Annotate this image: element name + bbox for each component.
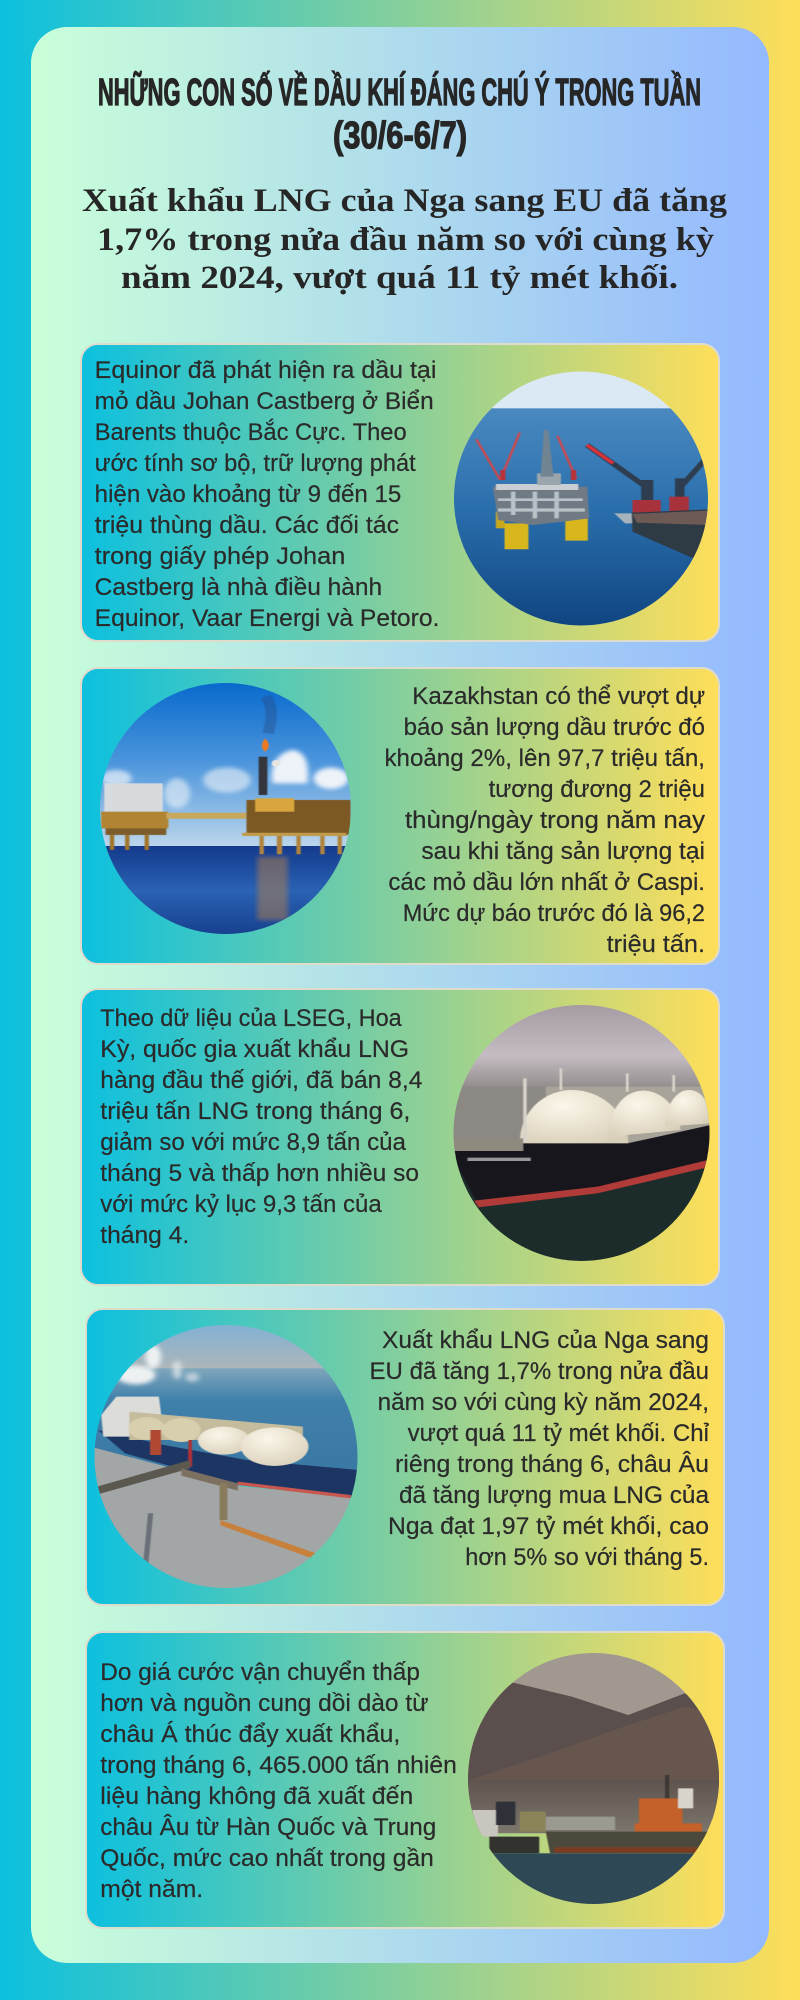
text block: Kazakhstan [384, 683, 705, 958]
text block: Russia LNG: riêng trong tháng 6, châu Âu [395, 1451, 709, 1478]
text block: jet fuel: hơn và nguồn cung dồi dào từ [100, 1690, 429, 1717]
title [98, 69, 701, 157]
text block: LSEG [100, 1005, 423, 1249]
reflection on water [257, 857, 288, 920]
text block: jet fuel: liệu hàng không đã xuất đến [100, 1783, 413, 1810]
panel: LSEG US LNG [81, 989, 719, 1285]
text block: Equinor: triệu thùng dầu. Các đối tác [95, 512, 399, 539]
title: (30/6-6/7) [333, 115, 467, 157]
text block: Equinor: hiện vào khoảng từ 9 đến 15 [95, 481, 401, 508]
photo: LNG tanker at terminal [90, 1322, 364, 1590]
text block: Equinor: mỏ dầu Johan Castberg ở Biển [95, 388, 434, 415]
subtitle: năm 2024, vượt quá 11 tỷ mét khối. [121, 260, 678, 296]
text block: Kazakhstan: sau khi tăng sản lượng tại [421, 838, 705, 865]
panel: Equinor Johan Castberg [81, 344, 719, 641]
text block: Kazakhstan: khoảng 2%, lên 97,7 triệu tấn, [384, 745, 705, 772]
text block: jet fuel: một năm. [100, 1876, 203, 1903]
text block: Kazakhstan: các mỏ dầu lớn nhất ở Caspi. [388, 869, 705, 896]
text block: Kazakhstan: thùng/ngày trong năm nay [405, 807, 705, 834]
text block: LSEG: Theo dữ liệu của LSEG, Hoa [100, 1005, 402, 1032]
photo: offshore platform and crane vessel [450, 367, 715, 628]
subtitle [82, 183, 728, 296]
text block: jet fuel: trong tháng 6, 465.000 tấn nhiên [100, 1752, 457, 1779]
panel: Russia LNG export to EU [86, 1309, 724, 1605]
text block: Kazakhstan: Mức dự báo trước đó là 96,2 [403, 900, 705, 927]
text block: jet fuel: Do giá cước vận chuyển thấp [100, 1659, 420, 1686]
text block: Russia LNG: Xuất khẩu LNG của Nga sang [382, 1327, 709, 1354]
text block: Equinor: Equinor đã phát hiện ra dầu tại [95, 357, 436, 384]
text block: LSEG: Kỳ, quốc gia xuất khẩu LNG [100, 1036, 409, 1063]
subtitle: 1,7% trong nửa đầu năm so với cùng kỳ [97, 222, 715, 258]
text block: jet fuel: Quốc, mức cao nhất trong gần [100, 1845, 434, 1872]
text block: Russia LNG: vượt quá 11 tỷ mét khối. Chỉ [408, 1420, 710, 1447]
text block: Kazakhstan: Kazakhstan có thể vượt dự [412, 683, 705, 710]
photo: LNG carrier Energy Progress [450, 1003, 715, 1263]
text block: Russia LNG: EU đã tăng 1,7% trong nửa đầu [370, 1358, 709, 1385]
text block: Kazakhstan: tương đương 2 triệu [489, 776, 705, 803]
text block: LSEG: triệu tấn LNG trong tháng 6, [100, 1098, 410, 1125]
text block: Russia LNG: đã tăng lượng mua LNG của [399, 1482, 710, 1509]
text block: Russia LNG [370, 1327, 710, 1571]
text block: LSEG: tháng 5 và thấp hơn nhiều so [100, 1160, 419, 1187]
card background [81, 989, 719, 1285]
photo: port, mountains and tanker [463, 1650, 724, 1907]
subtitle: Xuất khẩu LNG của Nga sang EU đã tăng [82, 183, 728, 219]
text block: Kazakhstan: triệu tấn. [607, 931, 705, 958]
text block: Russia LNG: Nga đạt 1,97 tỷ mét khối, cao [388, 1513, 709, 1540]
photo: oil platforms at sea [95, 680, 359, 936]
text block: Equinor [95, 357, 439, 632]
card background [81, 344, 719, 641]
text block: Russia LNG: hơn 5% so với tháng 5. [465, 1544, 709, 1571]
text block: jet fuel: châu Âu từ Hàn Quốc và Trung [100, 1814, 436, 1841]
text block: jet fuel [100, 1659, 457, 1903]
text block: LSEG: hàng đầu thế giới, đã bán 8,4 [100, 1067, 423, 1094]
text block: Equinor: Barents thuộc Bắc Cực. Theo [95, 419, 407, 446]
text block: Kazakhstan: báo sản lượng dầu trước đó [404, 714, 705, 741]
text block: LSEG: tháng 4. [100, 1222, 189, 1249]
card background [81, 668, 719, 964]
text block: Equinor: Castberg là nhà điều hành [95, 574, 382, 601]
card background [86, 1309, 724, 1605]
panel: Kazakhstan [81, 668, 719, 964]
text block: Equinor: trong giấy phép Johan [95, 543, 345, 570]
card background [86, 1632, 724, 1928]
text block: Russia LNG: năm so với cùng kỳ năm 2024, [378, 1389, 709, 1416]
text block: jet fuel: châu Á thúc đẩy xuất khẩu, [100, 1721, 400, 1748]
text block: LSEG: giảm so với mức 8,9 tấn của [100, 1129, 407, 1156]
panel: jet fuel exports [86, 1632, 724, 1928]
text block: Equinor: ước tính sơ bộ, trữ lượng phát [95, 450, 416, 477]
text block: Equinor: Equinor, Vaar Energi và Petoro. [95, 605, 439, 632]
text block: LSEG: với mức kỷ lục 9,3 tấn của [100, 1191, 382, 1218]
